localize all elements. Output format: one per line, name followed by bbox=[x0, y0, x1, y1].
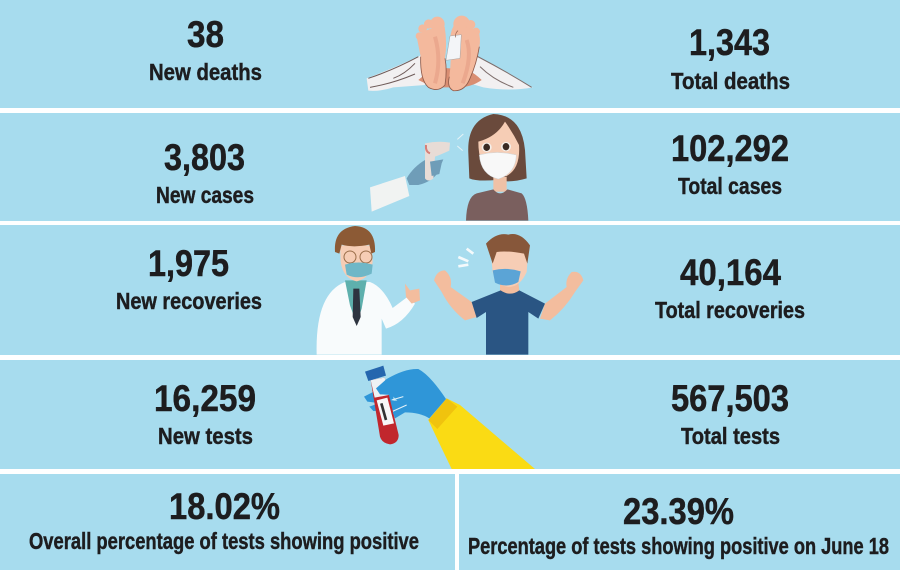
icon: feet with toe tag bbox=[367, 16, 533, 91]
icon: gloved hand holding blood test tube bbox=[364, 366, 535, 469]
icon: thermometer check on masked woman bbox=[370, 114, 528, 221]
stat: new tests: 16,259 bbox=[154, 378, 256, 419]
stat: new deaths bbox=[149, 14, 262, 85]
stat: total tests: 567,503 bbox=[671, 378, 789, 419]
stat: new cases: New cases bbox=[156, 182, 254, 208]
stat: new deaths: New deaths bbox=[149, 59, 262, 85]
stat: new deaths: 38 bbox=[187, 14, 224, 55]
panel: cases bbox=[0, 113, 900, 221]
stat: total tests: Total tests bbox=[681, 423, 780, 449]
panel: overall percentage positive bbox=[0, 474, 455, 570]
stat: new recoveries: 1,975 bbox=[148, 243, 229, 284]
recovered man bbox=[434, 234, 583, 355]
panel: tests bbox=[0, 360, 900, 469]
stat: new recoveries bbox=[116, 243, 262, 314]
stat: total recoveries bbox=[655, 252, 805, 323]
stat: total deaths bbox=[671, 22, 790, 94]
label: overall percentage: Overall percentage of tests showing positive bbox=[29, 528, 419, 554]
stat: total cases: Total cases bbox=[678, 173, 782, 199]
stat: total cases bbox=[671, 128, 789, 199]
stat: new tests: New tests bbox=[158, 423, 253, 449]
panel: June 18 percentage positive bbox=[459, 474, 900, 570]
stat: new recoveries: New recoveries bbox=[116, 288, 262, 314]
doctor bbox=[317, 226, 420, 355]
stat: 18.02%: 18.02% bbox=[169, 486, 280, 527]
panel: deaths bbox=[0, 0, 900, 108]
stat: total deaths: 1,343 bbox=[689, 22, 770, 63]
stat: 23.39%: 23.39% bbox=[623, 491, 734, 532]
stat: new cases: 3,803 bbox=[164, 137, 245, 178]
stat: new tests bbox=[154, 378, 256, 449]
stat: total deaths: Total deaths bbox=[671, 68, 790, 94]
stat: total tests bbox=[671, 378, 789, 449]
stat: total recoveries: 40,164 bbox=[680, 252, 781, 293]
icon: doctor and recovered man bbox=[317, 226, 583, 355]
stat: new cases bbox=[156, 137, 254, 208]
stat: total recoveries: Total recoveries bbox=[655, 297, 805, 323]
panel: recoveries bbox=[0, 225, 900, 355]
stat: total cases: 102,292 bbox=[671, 128, 789, 169]
